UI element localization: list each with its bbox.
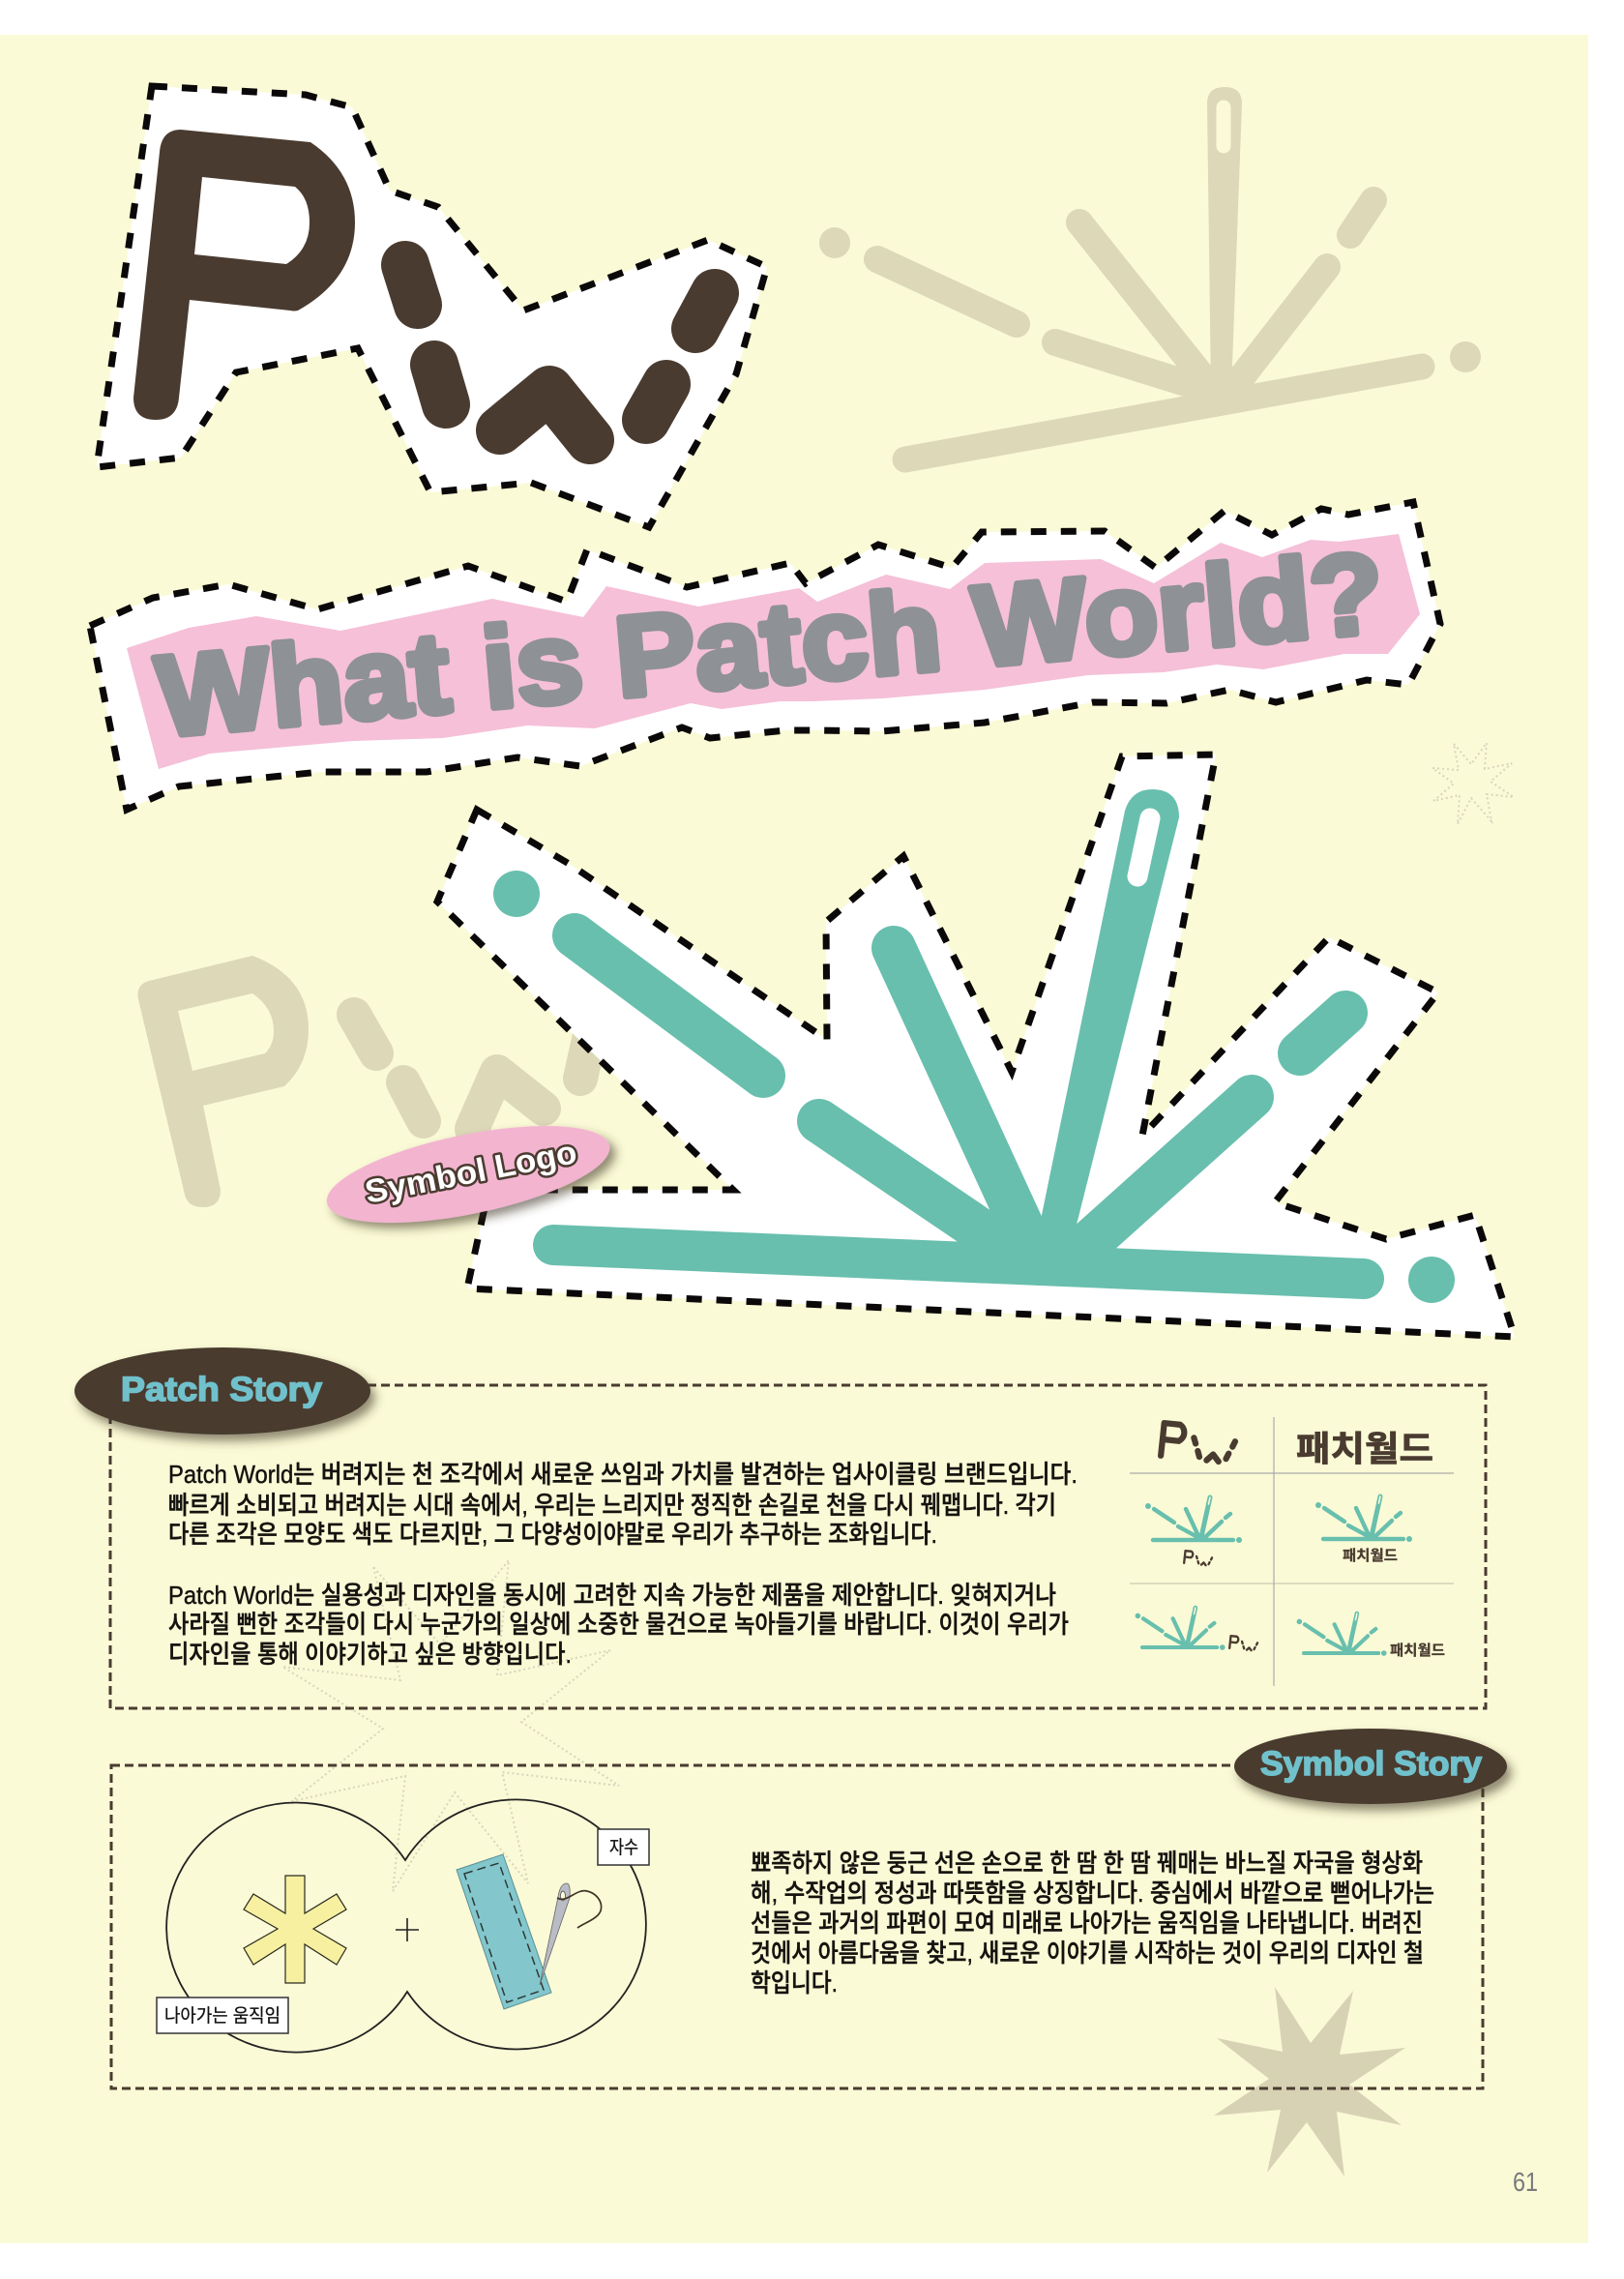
logo variant: Pw wordmark (1158, 1420, 1235, 1462)
badge: Patch Story (74, 1347, 370, 1435)
logo variant: Korean wordmark: 패치월드 (1296, 1429, 1433, 1468)
logo patch: Pw cutout (97, 86, 767, 527)
logo variant: symbol over Pw (1145, 1497, 1242, 1565)
label: embroidery: 자수 (609, 1837, 638, 1858)
page number: 61 (1513, 2167, 1538, 2197)
body text: symbol meaning: 해, 수작업의 정성과 따뜻함을 상징합니다. 중심에서 바깥으로 뻗어나가는 (751, 1879, 1434, 1908)
icon: asterisk of forward motion (244, 1876, 346, 1983)
body text: brand description: Patch World는 실용성과 디자인을 동시에 고려한 지속 가능한 제품을 제안합니다. 잊혀지거나 (168, 1581, 1056, 1610)
badge: Symbol Logo: Symbol Logo (362, 1134, 579, 1211)
logo variant: symbol beside Korean wordmark (1297, 1613, 1445, 1659)
body text: brand description: 디자인을 통해 이야기하고 싶은 방향입니다. (168, 1640, 572, 1669)
background logo: faded Pw (137, 956, 590, 1207)
label: embroidery (598, 1829, 649, 1865)
label: moving forward (157, 1998, 288, 2033)
label: moving forward: 나아가는 움직임 (164, 2005, 281, 2027)
body text: symbol meaning: 학입니다. (751, 1968, 838, 1998)
outline: overlapping circles (166, 1799, 646, 2053)
background icon: faded needle symbol (819, 87, 1481, 459)
symbol: needle (1035, 789, 1179, 1248)
body text: brand description: Patch World는 버려지는 천 조각에서 새로운 쓰임과 가치를 발견하는 업사이클링 브랜드입니다. (168, 1460, 1078, 1489)
decoration: small dotted star (1432, 743, 1514, 824)
body text: symbol meaning: 선들은 과거의 파편이 모여 미래로 나아가는 움직임을 나타냅니다. 버려진 (751, 1909, 1423, 1938)
badge: Symbol Story: Symbol Story (1260, 1745, 1483, 1783)
logo variations table (1130, 1417, 1454, 1686)
badge: Symbol Story (1234, 1729, 1507, 1804)
symbol patch: needle cutout (437, 755, 1515, 1337)
logo variant: symbol over Korean wordmark (1315, 1496, 1412, 1564)
body text: brand description: 빠르게 소비되고 버려지는 시대 속에서, 우리는 느리지만 정직한 손길로 천을 다시 꿰맵니다. 각기 (168, 1491, 1056, 1520)
diagram: symbol composition (157, 1799, 649, 2053)
title banner (90, 502, 1440, 810)
decoration: solid beige star (1214, 1987, 1405, 2176)
badge: Patch Story: Patch Story (121, 1371, 323, 1408)
logo variant: symbol beside Pw (1136, 1608, 1257, 1650)
body text: symbol meaning: 뾰족하지 않은 둥근 선은 손으로 한 땀 한 땀 꿰매는 바느질 자국을 형상화 (751, 1849, 1423, 1878)
title text: What is Patch World? (152, 529, 1389, 761)
panel: Symbol Story (111, 1729, 1507, 2088)
body text: symbol meaning: 것에서 아름다움을 찾고, 새로운 이야기를 시작하는 것이 우리의 디자인 철 (751, 1939, 1424, 1968)
plus sign (396, 1918, 419, 1941)
icon: needle and thread (540, 1883, 602, 1985)
icon: blue fabric patch (457, 1854, 551, 2009)
decoration: large dotted star (282, 1560, 619, 1891)
badge: Symbol Logo (319, 1107, 617, 1242)
panel: Patch Story (74, 1347, 1486, 1708)
logo variant: symbol beside Korean wordmark: 패치월드 (1390, 1643, 1445, 1659)
logo: w strokes (405, 265, 715, 440)
body text: brand description: 다른 조각은 모양도 색도 다르지만, 그 다양성이야말로 우리가 추구하는 조화입니다. (168, 1520, 937, 1549)
symbol: rays (575, 935, 1345, 1263)
logo variant: symbol over Korean wordmark: 패치월드 (1343, 1548, 1398, 1564)
body text: brand description: 사라질 뻔한 조각들이 다시 누군가의 일상에 소중한 물건으로 녹아들기를 바랍니다. 이것이 우리가 (168, 1610, 1069, 1639)
logo: P (133, 130, 355, 420)
